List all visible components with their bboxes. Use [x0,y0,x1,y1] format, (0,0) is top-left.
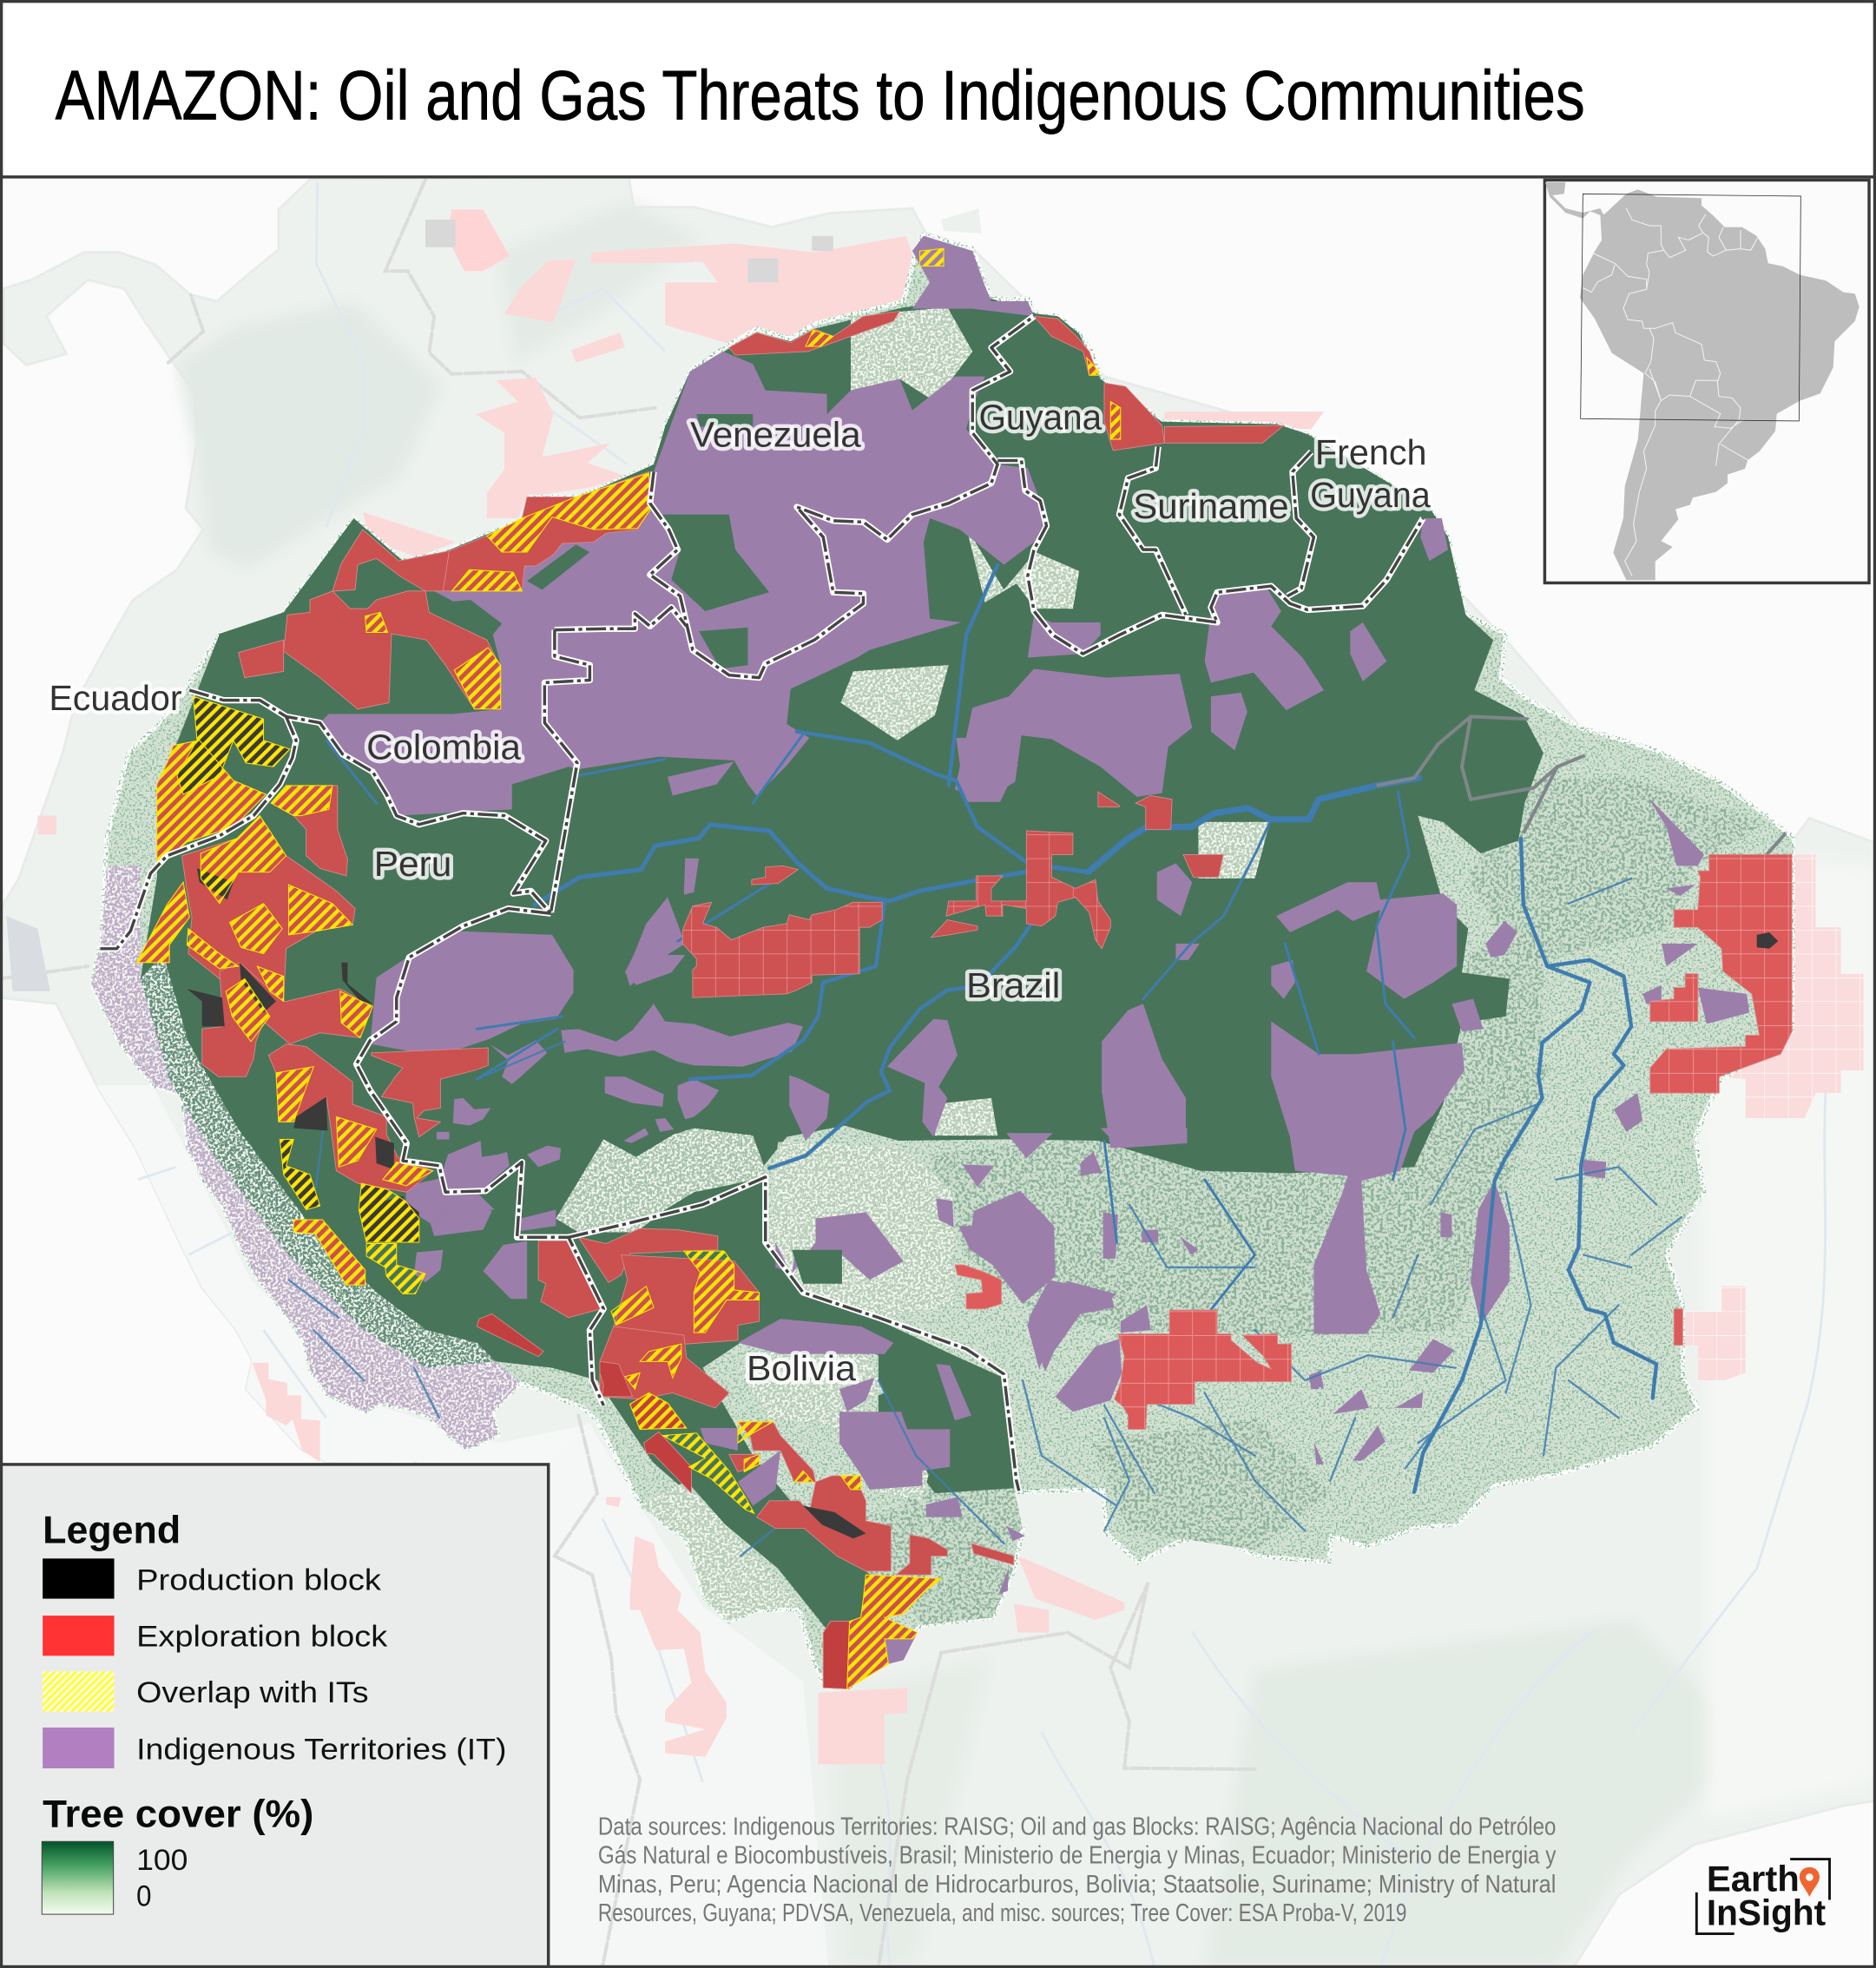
text: exploration block: Exploration block [136,1620,388,1653]
light clearings inside forest [640,307,1270,1622]
extent rectangle [1581,194,1800,421]
production blocks [177,696,1778,1538]
label: Brazil: Brazil [966,965,1060,1005]
exploration blocks [137,312,1792,1689]
swatch: overlap with ITs [43,1671,115,1712]
overlap with indigenous territories (hatched) [137,248,1121,1689]
label: French Guyana: French [1315,432,1427,472]
northern coast blocks [729,312,899,355]
data sources note [598,1813,1557,1927]
logo: Earth InSight [1696,1858,1830,1934]
title bar [1,1,1875,177]
title: AMAZON: Oil and Gas Threats to Indigenous Communities [56,56,1585,135]
west Andes fringe: purple speckled territories [92,866,521,1450]
Amazon basin: light mottled tree cover [92,234,1794,1689]
legend heading: Legend [43,1508,181,1551]
dense forest (dark green) [141,299,1544,1631]
South America landmass [1580,189,1860,580]
text: production block: Production block [136,1563,382,1596]
border dashes [101,316,1423,1491]
Bolivia and Peru south blocks [538,1241,606,1318]
label: Ecuador: Ecuador [49,678,182,718]
label: French Guyana second line: Guyana [1310,475,1431,515]
logo: Earth InSight: InSight [1707,1892,1826,1932]
data sources note: Resources, Guyana; PDVSA, Venezuela, and misc. sources; Tree Cover: ESA Proba-V, 2019 [598,1899,1406,1927]
speckled clearing along the Bolivia border [556,1129,768,1232]
legend panel [0,1464,549,1968]
Brazil blocks [682,902,882,997]
data sources note: Minas, Peru; Agencia Nacional de Hidrocarburos, Bolivia; Staatsolie, Suriname; Ministry of Natural [598,1871,1556,1899]
logo: Earth InSight: Earth [1707,1858,1800,1899]
inset locator map [1544,180,1869,583]
label: Peru: Peru [374,844,451,884]
dense mottled forest zones [816,778,1767,1625]
Amazon main stem [1088,778,1419,872]
label: Venezuela: Venezuela [690,415,861,455]
tree cover max: 100 [136,1844,188,1877]
swatch: production block [43,1558,115,1599]
indigenous territories [320,236,1749,1664]
label: Suriname: Suriname [1133,486,1289,526]
swatch: exploration block [43,1616,115,1655]
country borders [101,316,1423,1491]
swatch: indigenous territories [43,1728,115,1768]
country labels [49,397,1431,1388]
text: overlap with ITs: Overlap with ITs [136,1676,369,1709]
tree cover heading: Tree cover (%) [43,1793,313,1836]
forest openings inside territories [433,414,842,1284]
border casing [101,316,1423,1491]
Andes ridge: speckled green [141,954,496,1368]
label: Bolivia: Bolivia [747,1348,856,1388]
Venezuela and Colombia territory [320,352,1047,816]
text: indigenous territories: Indigenous Territories (IT) [136,1734,507,1767]
label: Colombia: Colombia [366,727,521,767]
tree cover gradient [42,1841,114,1914]
Amazon delta channels [1377,716,1786,866]
tree cover min: 0 [136,1880,151,1913]
icon: map pin [1800,1867,1820,1897]
oil and gas blocks outside the basin (faded) [6,209,1864,1764]
data sources note: Data sources: Indigenous Territories: RAISG; Oil and gas Blocks: RAISG; Agência Nacional do Petróleo [598,1813,1556,1840]
label: Guyana: Guyana [978,397,1103,437]
data sources note: Gás Natural e Biocombustíveis, Brasil; Ministerio de Energia y Minas, Ecuador; Ministerio de Energia y [598,1842,1557,1870]
rivers [288,564,1682,1556]
